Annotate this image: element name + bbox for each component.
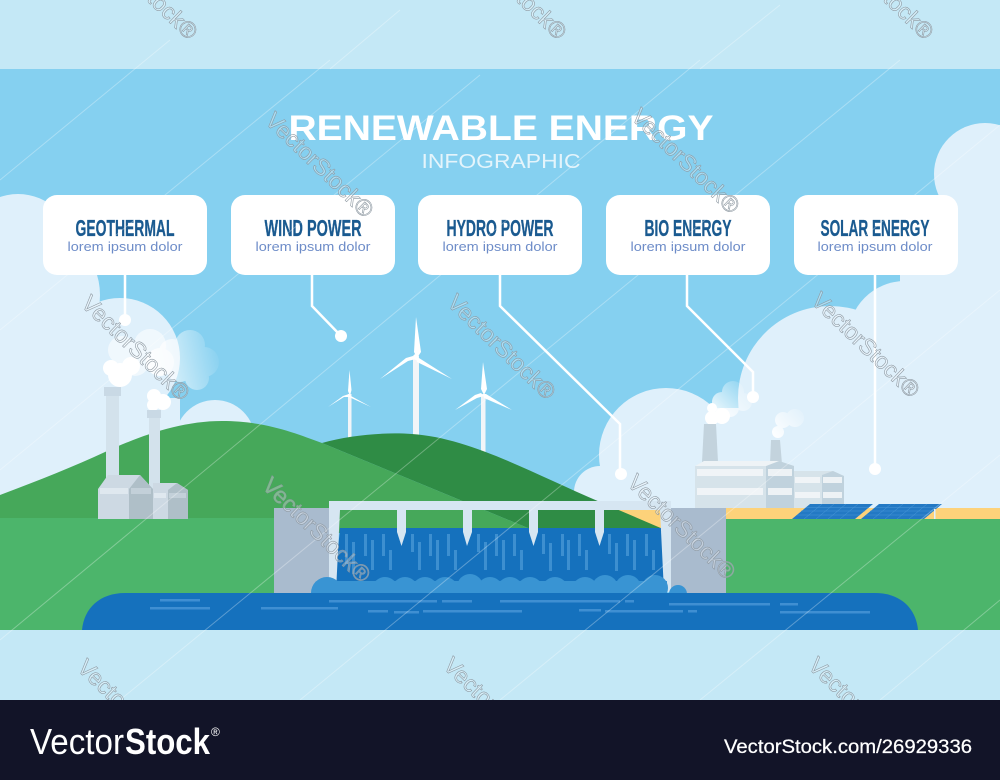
card: solar energy: SOLAR ENERGY: [820, 215, 930, 241]
card: wind power: WIND POWER: [264, 215, 362, 241]
watermarks: VectorStock®: [443, 289, 561, 405]
sand strip: [590, 508, 1000, 530]
watermarks: VectorStock®: [804, 652, 922, 768]
watermarks: VectorStock®: [439, 652, 557, 768]
card: geothermal: GEOTHERMAL: [76, 215, 174, 241]
smoke factory: [705, 381, 804, 438]
watermarks: VectorStock®: [73, 654, 191, 770]
ground left: [0, 518, 274, 630]
watermarks: VectorStock®: [807, 287, 925, 403]
chimney left: [106, 394, 119, 486]
building right: [153, 483, 188, 519]
waterfall: [335, 528, 665, 582]
footer logo: Stock: [125, 721, 211, 762]
connector: wind: [312, 274, 341, 336]
dam left block: [274, 508, 330, 593]
card: hydro power: lorem ipsum dolor: [442, 239, 558, 254]
card: bio energy: BIO ENERGY: [644, 215, 732, 241]
card: wind power: [231, 195, 395, 275]
footer logo: [30, 721, 220, 762]
card: solar energy: [794, 195, 958, 275]
factory: [695, 381, 844, 508]
dam right block: [671, 508, 726, 593]
card: solar energy: lorem ipsum dolor: [818, 239, 933, 254]
waterfall streaks: [345, 534, 655, 574]
panel 2: [861, 504, 942, 519]
card: hydro power: [418, 195, 582, 275]
card: hydro power: HYDRO POWER: [446, 215, 554, 241]
sky background: [0, 69, 1000, 630]
bottom band: [0, 630, 1000, 700]
background hills: [0, 421, 670, 533]
top band: [0, 0, 1000, 69]
panel 1: [792, 504, 873, 519]
watermarks: VectorStock®: [258, 472, 376, 588]
river: [82, 593, 918, 630]
hill: light green left: [0, 421, 540, 533]
subheading: INFOGRAPHIC: [422, 151, 580, 173]
hill: dark green right: [322, 433, 670, 533]
foam: [311, 574, 687, 609]
icon: turbine medium: [455, 362, 512, 456]
smoke left: [103, 329, 219, 411]
clouds right: [574, 123, 1000, 522]
card: bio energy: [606, 195, 770, 275]
dam bridge and piers: [329, 501, 671, 592]
footer bar: [0, 700, 1000, 780]
footer logo: Vector: [30, 721, 124, 762]
watermarks: VectorStock®: [623, 469, 741, 585]
footer logo: ®: [211, 725, 220, 739]
hall small: [794, 471, 844, 508]
hydro dam: [274, 501, 726, 609]
connector lines: [125, 274, 875, 473]
connector dots: [119, 314, 881, 480]
chimney right: [149, 415, 160, 490]
title: [288, 109, 714, 173]
icon: turbine large: [380, 317, 452, 436]
ground right: [726, 519, 1000, 630]
icon: turbine small: [328, 370, 371, 439]
footer url: VectorStock.com/26929336: [724, 737, 972, 758]
watermarks: VectorStock®: [627, 103, 745, 219]
connector: geothermal: [124, 274, 126, 320]
geothermal plant: [98, 329, 219, 519]
card: geothermal: [43, 195, 207, 275]
connector: solar: [874, 274, 876, 468]
watermarks: VectorStock®: [261, 107, 379, 223]
heading: RENEWABLE ENERGY: [288, 109, 714, 148]
chimneys: [702, 424, 718, 462]
hall large: [695, 461, 794, 508]
watermarks: VectorStock®: [77, 290, 195, 406]
clouds left: [0, 194, 255, 510]
card: bio energy: lorem ipsum dolor: [630, 239, 746, 254]
card: geothermal: lorem ipsum dolor: [68, 239, 183, 254]
connector: hydro: [500, 274, 620, 473]
building left: [98, 475, 153, 519]
river ripples: [150, 599, 870, 614]
card: wind power: lorem ipsum dolor: [256, 239, 371, 254]
connector: bio: [687, 274, 753, 396]
wind turbines: [328, 317, 512, 456]
solar panels: [792, 504, 942, 519]
